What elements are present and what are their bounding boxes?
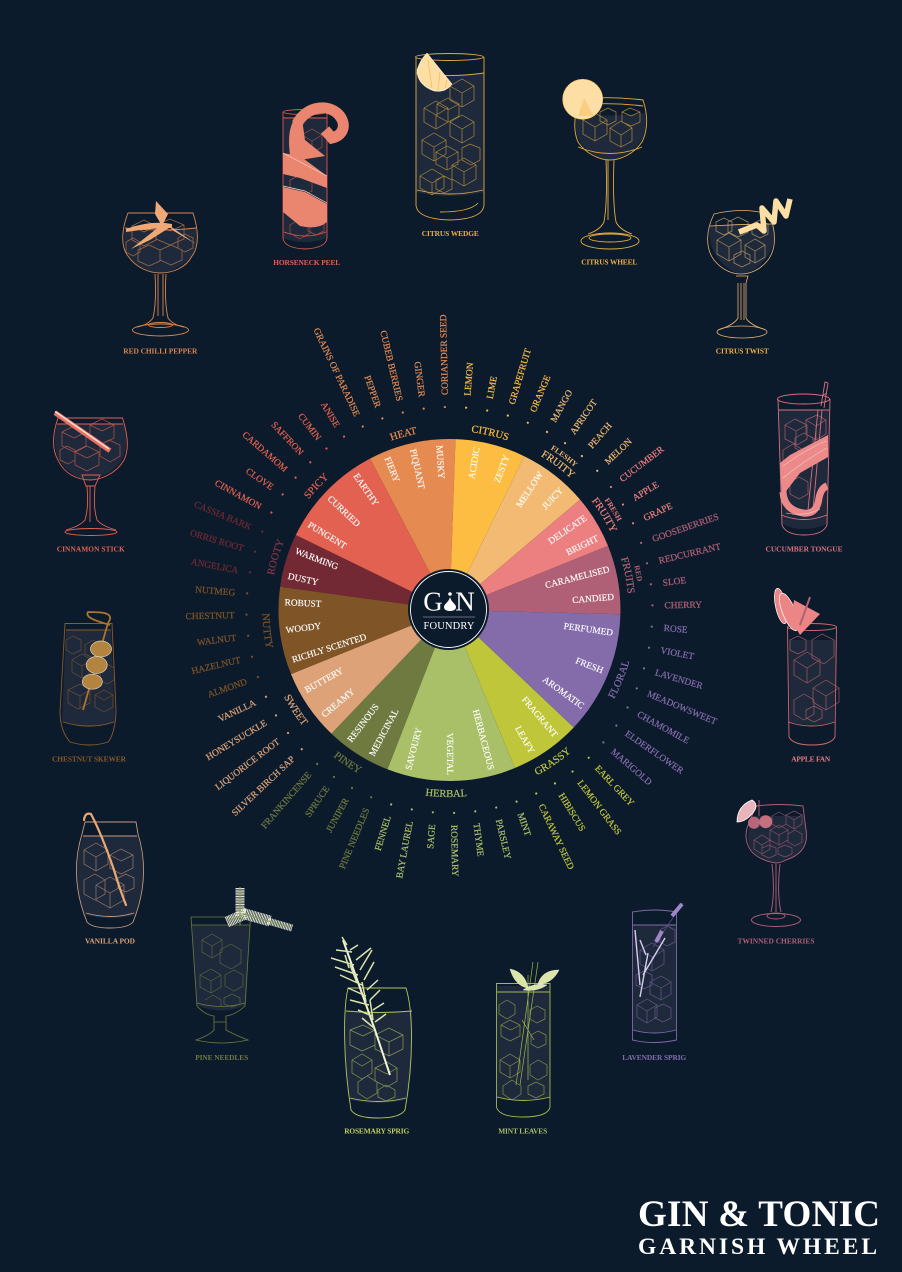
outer ring: citrus ingredients: LEMON [463, 362, 476, 396]
outer ring: floral ingredients: ROSE [663, 624, 688, 636]
garnish: vanilla pod [84, 814, 126, 905]
wheel descriptors: right half: AROMATIC [540, 675, 586, 712]
clockwise categories: HEAT [389, 426, 416, 441]
outer ring: citrus ingredients [462, 347, 553, 426]
outer ring: fresh fruit ingredients: GRAPE [642, 502, 675, 524]
outer ring: fresh fruit ingredients: APPLE [631, 480, 661, 504]
glass: cinnamon stick [54, 412, 127, 553]
wheel descriptors: left half: FIERY [382, 456, 401, 484]
clockwise categories: CITRUS [472, 426, 509, 440]
garnish: horseneck peel [283, 108, 343, 227]
outer ring: rooty ingredients: CASSIA BARK [192, 500, 253, 533]
wheel descriptors: left half: WOODY [285, 622, 322, 636]
wheel descriptors: right half: LEAFY [512, 725, 536, 756]
glass: citrus wheel [563, 79, 647, 267]
caption: CUCUMBER TONGUE [766, 545, 843, 554]
outer ring: spicy ingredients: CLOVE [243, 467, 275, 493]
wheel descriptors: left half: EARTHY [351, 472, 380, 509]
outer ring: heat ingredients: PEPPER [361, 374, 382, 410]
outer ring: heat ingredients: GRAINS OF PARADISE [311, 327, 361, 419]
outer ring: herbal ingredients: PARSLEY [493, 818, 512, 861]
wheel descriptors: right half: VEGETAL [444, 733, 454, 775]
counter-clockwise categories: FLORAL [608, 661, 630, 699]
wheel descriptors: left half: MUSKY [433, 445, 445, 479]
outer ring: spicy ingredients: CARDAMOM [240, 430, 289, 475]
garnish: citrus wheel [563, 79, 603, 119]
outer ring: fleshy fruit ingredients: PEACH [587, 421, 615, 451]
caption: APPLE FAN [791, 755, 831, 764]
caption: VANILLA POD [85, 937, 135, 946]
outer ring: red fruit ingredients [639, 512, 722, 612]
wheel descriptors: left half: ROBUST [284, 598, 322, 610]
caption: CHESTNUT SKEWER [52, 755, 127, 764]
outer ring: herbal ingredients: ROSEMARY [448, 825, 459, 877]
caption: HORSENECK PEEL [273, 258, 340, 267]
outer ring: grassy ingredients: EARL GREY [592, 764, 635, 809]
outer ring: piney ingredients: FRANKINCENSE [260, 770, 314, 831]
wheel descriptors: right half: MELLOW [515, 470, 546, 510]
clockwise categories: FRUITY [541, 450, 576, 478]
caption: PINE NEEDLES [195, 1053, 248, 1062]
outer ring: fresh fruit ingredients: CUCUMBER [618, 444, 667, 485]
caption: CITRUS WEDGE [422, 229, 479, 238]
caption: CITRUS WHEEL [581, 258, 637, 267]
glass: vanilla pod [77, 814, 143, 946]
outer ring: red fruit ingredients: GOOSEBERRIES [651, 512, 720, 545]
glass: apple fan [772, 587, 839, 764]
glass: twinned cherries [737, 800, 814, 946]
outer ring: floral ingredients: VIOLET [660, 646, 695, 662]
wheel descriptors: right half: CARAMELISED [544, 565, 611, 591]
wheel descriptors: right half: ACIDIC [468, 447, 483, 480]
outer ring: heat ingredients: GINGER [411, 361, 426, 398]
logo: Gin Foundry: FOUNDRY [424, 621, 475, 632]
outer ring: floral ingredients: MARIGOLD [608, 747, 653, 788]
wheel descriptors: right half: JUICY [541, 486, 566, 512]
outer ring: sweet ingredients: LIQUORICE ROOT [214, 737, 282, 793]
wheel descriptors: left half: PUNGENT [306, 521, 348, 552]
garnish: rosemary sprig [331, 937, 390, 1075]
clockwise categories: RED [634, 564, 642, 581]
wheel descriptors: right half [444, 447, 615, 775]
clockwise categories: SPICY [304, 472, 328, 499]
outer ring: piney ingredients: SPRUCE [304, 784, 332, 819]
glass: lavender sprig [622, 903, 687, 1062]
counter-clockwise categories: HERBAL [425, 788, 466, 798]
logo: Gin Foundry: N [455, 586, 475, 616]
glass: citrus twist [708, 199, 790, 355]
outer ring: nutty ingredients: ALMOND [207, 677, 249, 701]
garnish: cherries and leaf [737, 800, 772, 829]
outer ring: herbal ingredients: THYME [471, 823, 485, 857]
outer ring: fleshy fruit ingredients: MANGO [550, 388, 575, 424]
outer ring: rooty ingredients: ORRIS ROOT [189, 529, 245, 554]
counter-clockwise categories: GRASSY [534, 746, 570, 774]
garnish: chilli [126, 201, 196, 249]
counter-clockwise categories: SWEET [284, 694, 308, 725]
flavour wheel [279, 439, 620, 781]
clockwise categories: FLESHY [550, 445, 578, 466]
wheel descriptors: right half: ZESTY [493, 454, 512, 484]
title: GARNISH WHEEL [638, 1234, 877, 1260]
wheel descriptors: left half: MEDICINAL [368, 707, 402, 758]
outer ring: grassy ingredients: LEMON GRASS [575, 779, 623, 837]
wheel descriptors: left half [284, 445, 445, 771]
counter-clockwise categories [262, 613, 630, 798]
glass: red chilli pepper [123, 201, 198, 356]
wheel descriptors: left half: PIQUANT [407, 448, 426, 491]
glass: rosemary sprig [331, 937, 412, 1135]
outer ring: sweet ingredients [205, 693, 307, 819]
counter-clockwise categories: NUTTY [262, 613, 274, 648]
outer ring: spicy ingredients [213, 401, 348, 519]
glass: horseneck peel [273, 108, 343, 267]
wheel descriptors: right half: BRIGHT [565, 534, 601, 558]
wheel descriptors: right half: DELICATE [547, 514, 589, 547]
outer ring: red fruit ingredients: CHERRY [664, 601, 702, 611]
caption: TWINNED CHERRIES [738, 937, 814, 946]
outer ring: herbal ingredients, left side [374, 802, 439, 879]
wheel descriptors: right half: FRESH [574, 656, 605, 676]
garnish: cucumber ribbon [780, 435, 828, 514]
outer ring: red fruit ingredients: SLOE [662, 576, 687, 589]
outer ring: piney ingredients [260, 761, 377, 871]
glass: chestnut skewer [52, 612, 127, 764]
outer ring: spicy ingredients: SAFFRON [269, 420, 305, 458]
wheel descriptors: left half: RESINOUS [346, 703, 382, 745]
outer ring: red fruit ingredients: REDCURRANT [658, 542, 722, 567]
wheel descriptors: left half: SAVOURY [404, 727, 425, 771]
outer ring: nutty ingredients: HAZELNUT [191, 656, 242, 677]
outer ring: herbal ingredients, left side: BAY LAUREL [395, 820, 416, 879]
outer ring: rooty ingredients: ANGELICA [190, 558, 239, 576]
outer ring: nutty ingredients [186, 585, 261, 701]
outer ring: floral ingredients: LAVENDER [654, 668, 704, 692]
wheel segments [279, 439, 620, 781]
outer ring: citrus ingredients: GRAPEFRUIT [508, 347, 534, 406]
outer ring: piney ingredients: JUNIPER [325, 796, 352, 835]
wheel descriptors: right half: FRAGRANT [519, 695, 559, 740]
outer ring: heat ingredients: CORIANDER SEED [439, 314, 451, 395]
caption: ROSEMARY SPRIG [344, 1126, 409, 1135]
glass: citrus wedge [416, 53, 484, 238]
caption: CITRUS TWIST [716, 346, 769, 355]
wheel descriptors: right half: PERFUMED [563, 622, 614, 639]
wheel descriptors: left half: DUSTY [287, 572, 319, 588]
glass: mint leaves [496, 962, 559, 1135]
logo: Gin Foundry [408, 569, 489, 650]
caption: MINT LEAVES [498, 1126, 547, 1135]
outer ring: citrus ingredients: ORANGE [529, 374, 553, 414]
garnish: chestnut skewer [82, 612, 112, 710]
title [638, 1194, 880, 1260]
outer ring: floral ingredients: MEADOWSWEET [645, 690, 718, 728]
outer ring: heat ingredients [311, 314, 451, 430]
outer ring: fleshy fruit ingredients: MELON [603, 437, 635, 467]
counter-clockwise categories: PINEY [334, 751, 362, 773]
outer ring: fleshy fruit ingredients [543, 388, 635, 476]
wheel descriptors: left half: CREAMY [320, 687, 357, 720]
outer ring: floral ingredients [598, 623, 718, 788]
garnish: citrus wedge [417, 53, 452, 91]
garnish: cinnamon stick [55, 412, 110, 451]
wheel descriptors: right half: CANDIED [572, 593, 615, 606]
outer ring: sweet ingredients: SILVER BIRCH SAP [230, 755, 297, 819]
wheel descriptors: right half: HERBACEOUS [470, 709, 495, 771]
garnish: apple fan [772, 587, 820, 635]
garnish: citrus twist [739, 199, 790, 232]
clockwise categories: ROOTY [267, 538, 284, 576]
garnish: lavender sprig [635, 903, 683, 997]
outer ring: herbal ingredients, left side: SAGE [426, 824, 438, 849]
outer ring: grassy ingredients: HIBISCUS [556, 792, 587, 833]
wheel descriptors: left half: BUTTERY [304, 666, 346, 696]
outer ring: spicy ingredients: CUMIN [295, 412, 322, 443]
outer ring: herbal ingredients [448, 799, 532, 877]
outer ring: fleshy fruit ingredients: APRICOT [569, 398, 600, 437]
outer ring: herbal ingredients: MINT [515, 812, 532, 838]
outer ring: nutty ingredients: CHESTNUT [186, 611, 235, 622]
outer ring: floral ingredients: ELDERFLOWER [623, 729, 685, 777]
clockwise categories: FRUITS [621, 556, 635, 594]
clockwise categories [267, 426, 642, 594]
outer ring: citrus ingredients: LIME [486, 375, 500, 400]
wheel descriptors: left half: WARMING [293, 547, 340, 573]
wheel descriptors: left half: RICHLY SCENTED [291, 633, 368, 666]
garnish: mint leaves [510, 969, 559, 990]
outer ring: grassy ingredients: CARAWAY SEED [536, 803, 575, 872]
outer ring: heat ingredients: CUBEB BERRIES [377, 330, 404, 402]
outer ring: grassy ingredients [530, 754, 635, 872]
category labels [262, 426, 642, 798]
glass: cucumber tongue [766, 382, 843, 554]
outer ring: spicy ingredients: ANISE [318, 401, 341, 430]
outer ring: fresh fruit ingredients [608, 444, 675, 529]
clockwise categories: FRUITY [592, 496, 618, 532]
outer ring: floral ingredients: CHAMOMILE [635, 710, 691, 747]
outer ring: rooty ingredients [189, 500, 265, 579]
wheel descriptors: left half: CURRIED [325, 494, 362, 530]
title: GIN & TONIC [638, 1194, 880, 1235]
outer ring: piney ingredients: PINE NEEDLES [338, 807, 372, 871]
caption: CINNAMON STICK [57, 544, 125, 553]
outer ring: spicy ingredients: CINNAMON [213, 479, 263, 512]
outer ring: herbal ingredients, left side: FENNEL [374, 815, 394, 852]
outer ring: sweet ingredients: HONEYSUCKLE [205, 718, 269, 763]
glass: pine needles [191, 887, 292, 1062]
outer ring: nutty ingredients: NUTMEG [195, 585, 236, 599]
outer ring: nutty ingredients: WALNUT [197, 634, 237, 649]
garnish: pine sprig [227, 887, 292, 928]
logo: Gin Foundry: G [423, 586, 443, 616]
caption: LAVENDER SPRIG [622, 1053, 687, 1062]
caption: RED CHILLI PEPPER [123, 347, 198, 356]
outer ring: sweet ingredients: VANILLA [217, 698, 258, 725]
clockwise categories: FRESH [604, 497, 622, 522]
